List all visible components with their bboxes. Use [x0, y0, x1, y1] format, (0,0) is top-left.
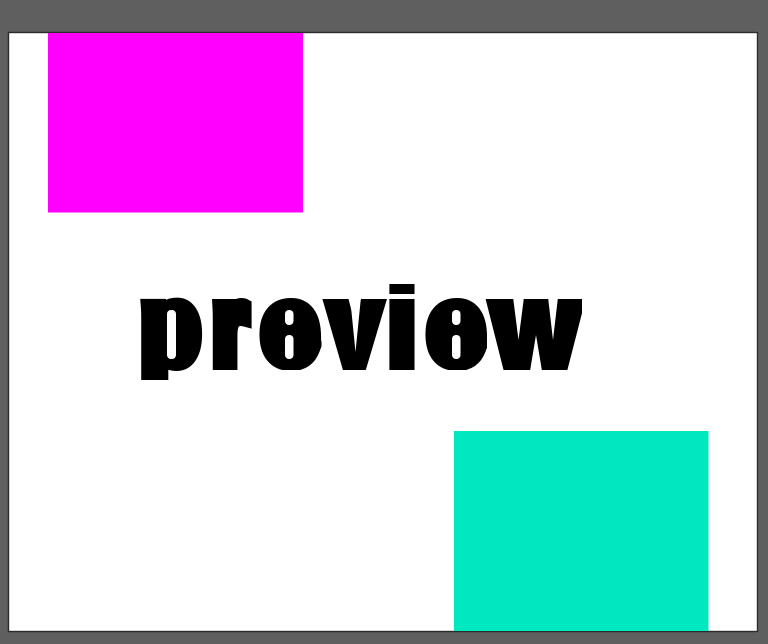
preview wordmark: r	[213, 269, 246, 385]
preview wordmark	[140, 284, 582, 380]
preview wordmark: v	[331, 269, 378, 385]
preview wordmark: e	[263, 269, 317, 385]
preview wordmark: w	[495, 269, 576, 385]
preview wordmark: i	[390, 269, 414, 385]
magenta rectangle	[48, 33, 303, 212]
teal rectangle	[454, 431, 708, 631]
preview wordmark: p	[142, 269, 199, 385]
preview wordmark: e	[429, 269, 483, 385]
